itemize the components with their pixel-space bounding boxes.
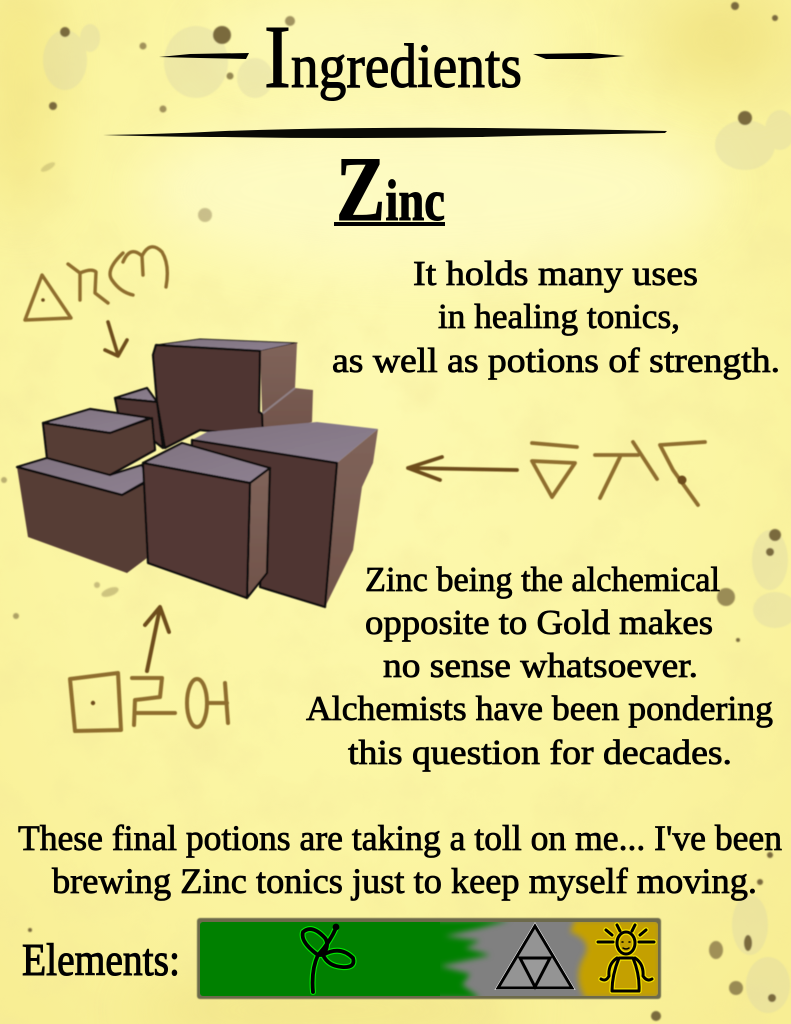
text block: journal note <box>18 818 782 901</box>
text block: opposite to gold: no sense whatsoever. <box>383 646 698 685</box>
icon: sun figure element <box>598 925 654 991</box>
rune label: top left <box>25 247 167 320</box>
zinc block illustration <box>17 339 378 607</box>
text block: uses: It holds many uses <box>413 254 698 293</box>
text block: journal note: brewing Zinc tonics just to keep myself moving. <box>52 861 757 901</box>
text block: uses: as well as potions of strength. <box>332 341 780 380</box>
icon: plant element <box>303 926 354 992</box>
arrow: up to block <box>145 607 169 671</box>
title flourish right <box>533 53 625 59</box>
text block: opposite to gold: Zinc being the alchemical <box>365 560 720 599</box>
icon: triforce air element <box>498 926 572 988</box>
heading: Zinc: Zinc <box>336 138 445 240</box>
title flourish left <box>159 53 249 59</box>
text block: opposite to gold: opposite to Gold makes <box>365 603 713 642</box>
text block: opposite to gold <box>306 560 773 772</box>
divider brush stroke <box>103 128 667 138</box>
text block: journal note: These final potions are taking a toll on me... I've been <box>18 818 782 858</box>
arrow: down to block <box>105 322 127 356</box>
label: Elements: Elements: <box>22 934 180 985</box>
text block: opposite to gold: this question for decades. <box>348 733 732 772</box>
arrow: left to block <box>408 457 517 480</box>
title: Ingredients <box>159 8 625 107</box>
rune label: right <box>532 442 705 505</box>
element bar <box>197 918 661 999</box>
rune label: bottom left <box>70 673 228 731</box>
text block: uses <box>332 254 780 380</box>
title text: Ingredients <box>264 8 522 107</box>
text block: opposite to gold: Alchemists have been pondering <box>306 689 773 728</box>
text block: uses: in healing tonics, <box>438 297 680 336</box>
